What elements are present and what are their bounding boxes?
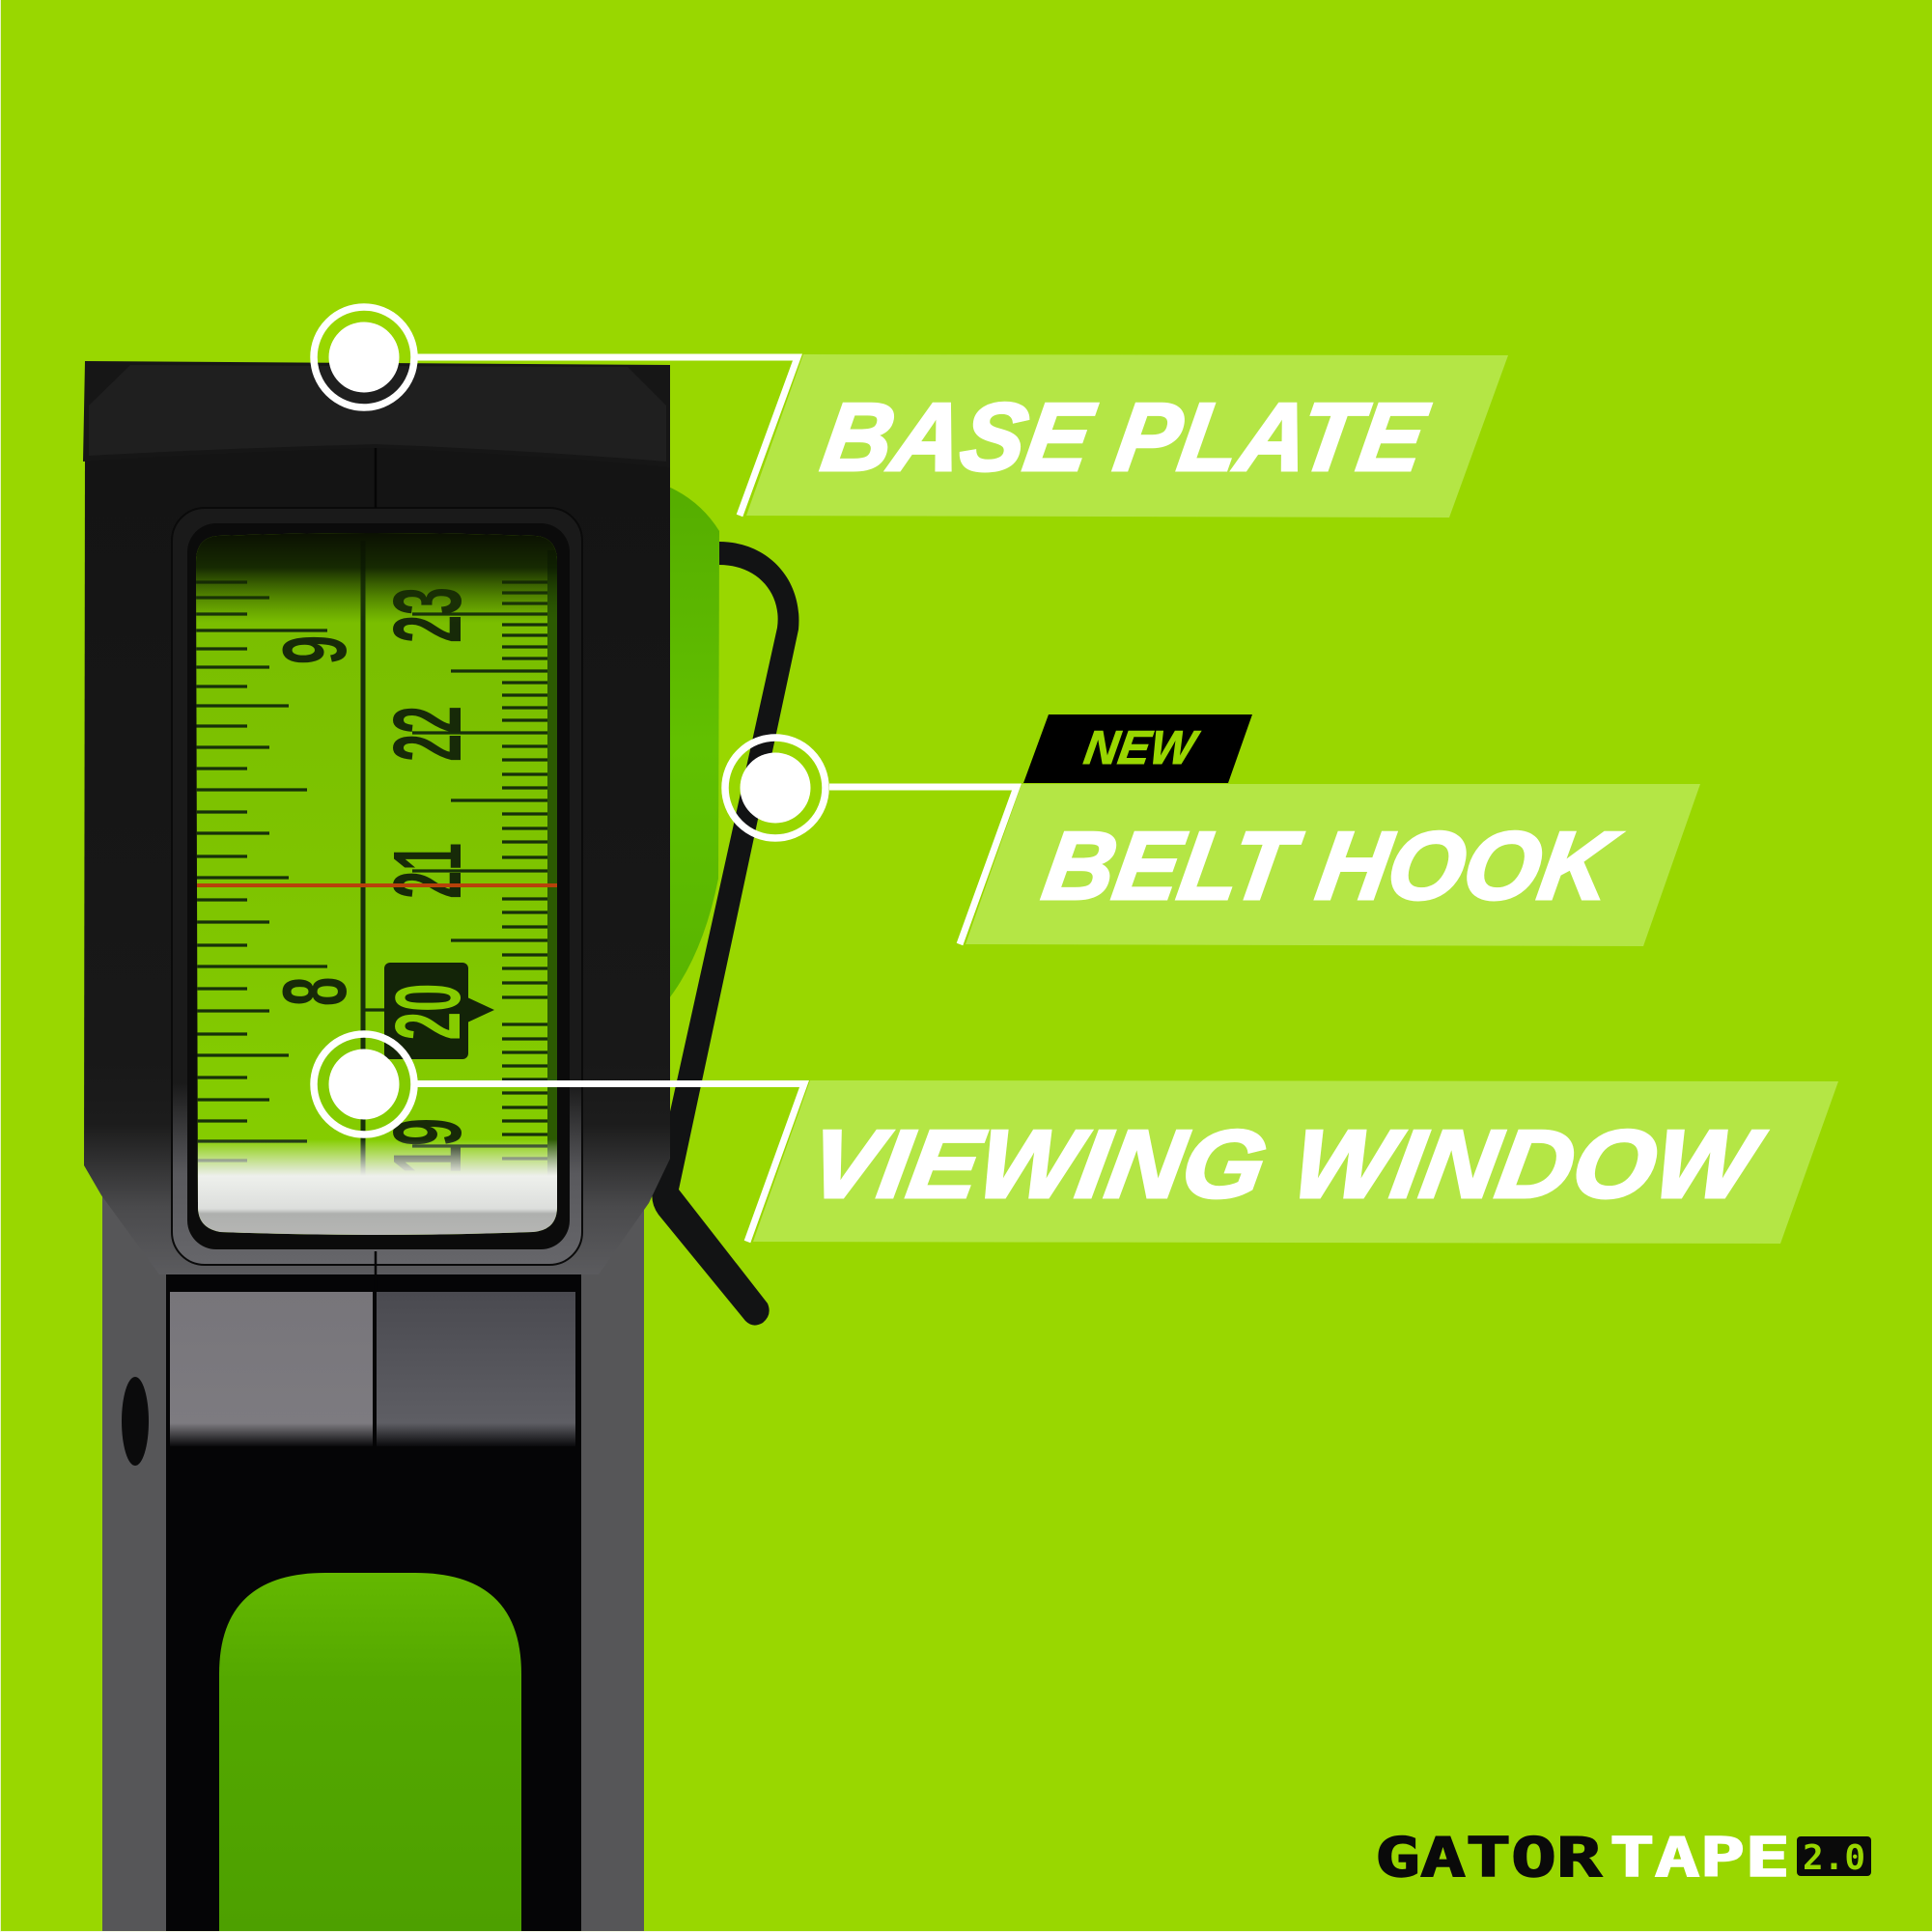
leader line — [829, 787, 1017, 944]
viewing window with tape — [196, 531, 557, 1236]
textured left panel — [170, 1292, 373, 1446]
logo: gatortape 2.0: GATOR — [1375, 1827, 1602, 1890]
tape centre line — [361, 541, 365, 1197]
tape right edge — [547, 550, 557, 1178]
tape numbers: 23 — [374, 587, 481, 643]
red hairline — [196, 883, 557, 887]
callout: belt hook — [725, 714, 1700, 946]
label: BASE PLATE — [816, 384, 1435, 491]
tape tick marks — [196, 582, 547, 1161]
tape numbers: 22 — [374, 706, 481, 762]
top window shadow — [196, 531, 557, 623]
side hole — [122, 1377, 149, 1466]
label: VIEWING WINDOW — [802, 1111, 1772, 1218]
bottom window glare — [196, 1139, 557, 1236]
tape 20 foot marker — [377, 963, 494, 1059]
new tag: NEW — [1080, 721, 1203, 774]
frame inner black band — [187, 523, 570, 1249]
marker dot — [725, 738, 826, 838]
green button — [219, 1573, 521, 1932]
upper housing — [84, 439, 670, 1274]
belt hook wire — [652, 542, 798, 1326]
callout: viewing window — [314, 1034, 1838, 1244]
tape 20 foot marker: 20 — [377, 984, 480, 1040]
base plate — [83, 361, 670, 467]
leader line — [417, 357, 798, 516]
leader line — [417, 1083, 804, 1242]
label: BELT HOOK — [1037, 813, 1626, 920]
window frame — [172, 508, 582, 1265]
banner — [966, 784, 1700, 946]
tape numbers: 9 — [265, 635, 366, 664]
banner — [746, 354, 1508, 518]
logo: gatortape 2.0: 2.0 — [1803, 1838, 1865, 1878]
banner — [753, 1080, 1838, 1244]
tape numbers: 8 — [265, 977, 366, 1006]
housing seam — [375, 448, 377, 1290]
tape numbers: 21 — [374, 843, 481, 899]
lower handle body — [102, 1188, 644, 1932]
green spool housing — [666, 486, 719, 1002]
callout: base plate — [314, 307, 1508, 518]
marker dot — [314, 307, 414, 407]
tape numbers: 19 — [374, 1118, 481, 1174]
textured right panel — [377, 1292, 575, 1446]
tape measure product — [83, 361, 798, 1932]
tape numbers — [265, 587, 481, 1174]
marker dot — [314, 1034, 414, 1134]
logo: gatortape 2.0 — [1375, 1827, 1871, 1890]
logo: gatortape 2.0: TAPE — [1610, 1827, 1790, 1890]
new tag — [1023, 714, 1252, 783]
